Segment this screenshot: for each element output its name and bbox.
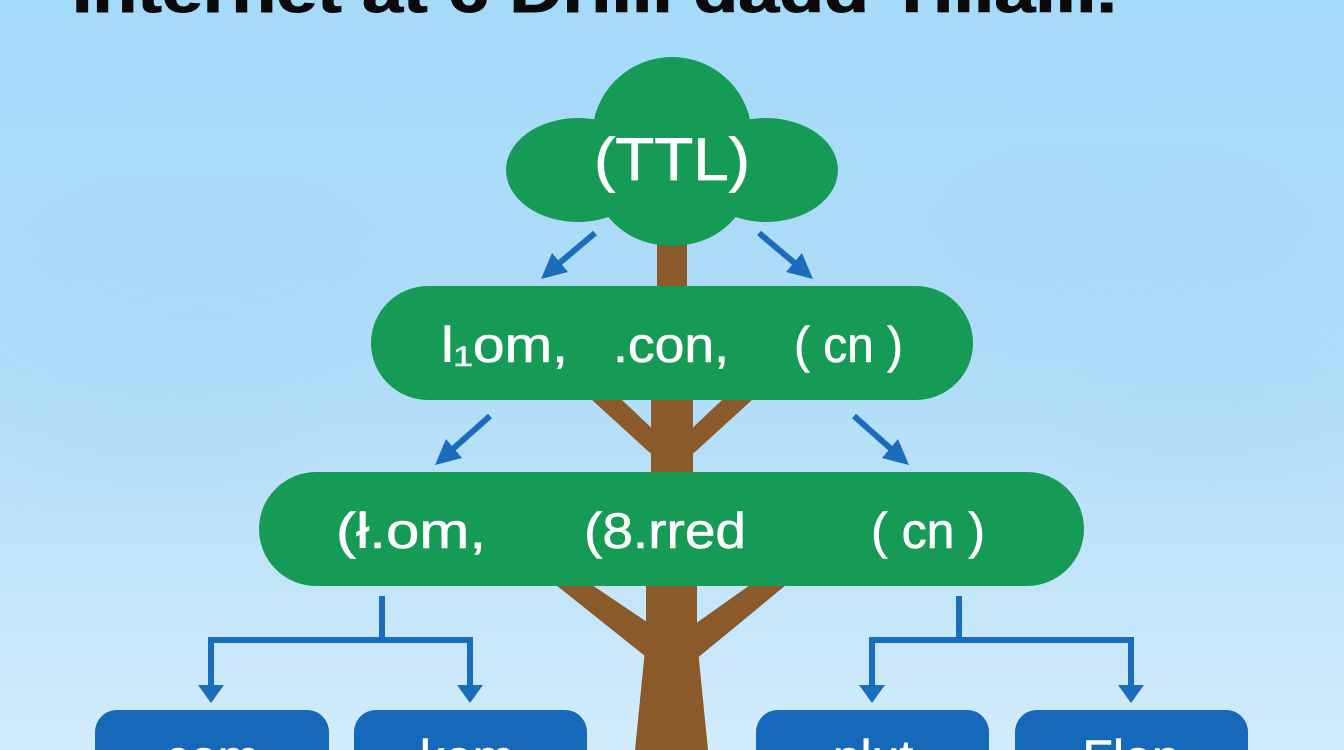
label: tier 3 left: (ł.om, — [336, 503, 486, 559]
leaf box: com — [95, 710, 329, 750]
label: tier 3 middle: (8.rred — [584, 503, 746, 559]
label: tier 2 left: l₁om, — [441, 317, 568, 373]
label: tier 3 right: ( cn ) — [871, 503, 985, 559]
arrow: top right — [759, 233, 813, 279]
arrow: top left — [541, 233, 595, 279]
connector: left bracket — [198, 596, 483, 703]
arrow: middle left — [435, 416, 490, 465]
leaf box: Flon — [1015, 710, 1248, 750]
connector: right bracket — [859, 596, 1144, 703]
label: tier 2 middle: .con, — [613, 317, 729, 373]
arrow: middle right — [854, 416, 909, 465]
leaf box: nlut — [756, 710, 989, 750]
label: tier 2 right: ( cn ) — [794, 317, 903, 373]
tree trunk and branches — [556, 235, 786, 750]
label: TTL: (TTL) — [594, 126, 750, 193]
leaf box: kom — [354, 710, 587, 750]
tier 3 panel — [259, 472, 1084, 586]
canopy: top cloud — [506, 57, 838, 246]
tier 2 panel — [371, 286, 973, 400]
